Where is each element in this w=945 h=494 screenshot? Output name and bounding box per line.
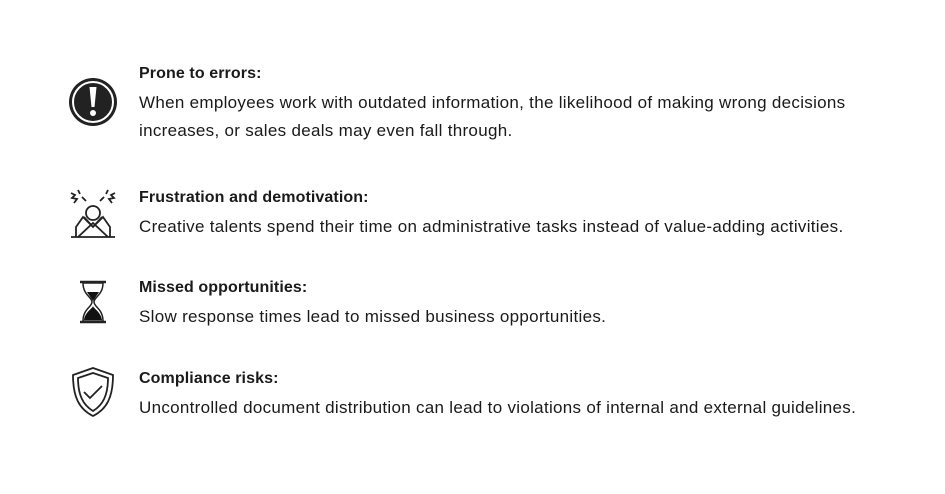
text: prone to errors: When employees work with outdated information, the likelihood of making wrong decisions (139, 92, 845, 112)
text: missed opportunities: Slow response times lead to missed business opportunities. (139, 306, 606, 326)
icon: exclamation (69, 78, 117, 126)
text: compliance: Compliance risks: (139, 370, 279, 387)
text: frustration: Frustration and demotivation: (139, 189, 369, 206)
icon: hourglass (80, 280, 106, 324)
icon: frustrated person (70, 190, 116, 238)
text: compliance (139, 370, 856, 416)
text: prone to errors: Prone to errors: (139, 65, 262, 82)
text: frustration (139, 189, 843, 236)
text: missed opportunities (139, 279, 606, 326)
text: prone to errors (139, 65, 845, 140)
text: prone to errors: increases, or sales deals may even fall through. (139, 121, 512, 140)
text: missed opportunities: Missed opportunities: (139, 279, 307, 296)
text: compliance: Uncontrolled document distribution can lead to violations of internal and external guidelines. (139, 398, 856, 416)
icon: shield check (72, 367, 114, 417)
text: frustration: Creative talents spend their time on administrative tasks instead of value-adding activities. (139, 216, 843, 236)
